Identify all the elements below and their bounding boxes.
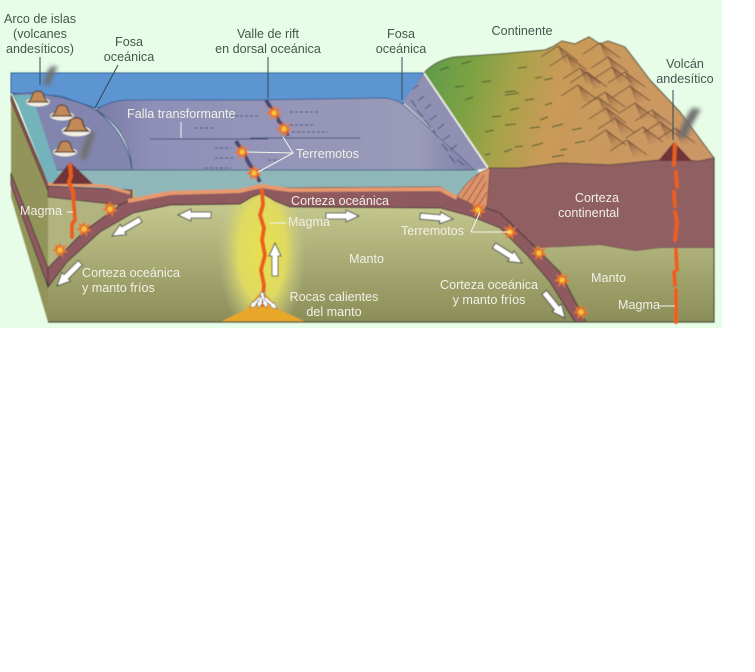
volcanic islands <box>26 91 91 156</box>
island arc sea floor <box>13 93 132 170</box>
label: rift valley: Valle de rift <box>237 27 299 41</box>
label: island arc: andesíticos) <box>6 42 74 56</box>
continent vegetation marks <box>440 61 585 157</box>
label: island arc: (volcanes <box>13 27 67 41</box>
labels <box>4 12 714 319</box>
label: cold crust left: Corteza oceánica <box>82 266 180 280</box>
label: trench right: Fosa <box>387 27 415 41</box>
label: cold crust right: Corteza oceánica <box>440 278 538 292</box>
mantle plume glow <box>223 194 301 314</box>
label: cold crust right: y manto fríos <box>453 293 525 307</box>
front frame <box>48 158 714 322</box>
label: island arc: Arco de islas <box>4 12 76 26</box>
hot rocks base <box>220 290 306 322</box>
accretionary wedge <box>457 168 490 210</box>
submerged teal band <box>48 168 480 204</box>
magma conduits <box>69 145 677 322</box>
volcano left <box>52 162 93 184</box>
label: andesitic volcano: Volcán <box>666 57 704 71</box>
label: mantle right: Manto <box>591 271 626 285</box>
oceanic crust and slabs <box>48 185 586 322</box>
label: mantle centre: Manto <box>349 252 384 266</box>
trench hatch marks <box>411 85 464 165</box>
label: andesitic volcano: andesítico <box>656 72 714 86</box>
continental crust <box>480 158 714 251</box>
arrows <box>53 209 570 322</box>
ocean floor surface <box>96 98 475 170</box>
smoke plumes <box>44 66 701 160</box>
left side face <box>11 93 48 322</box>
ocean water <box>11 73 424 108</box>
label: trench left: Fosa <box>115 35 143 49</box>
label: continent: Continente <box>492 24 552 38</box>
rift and transform faults <box>150 100 360 182</box>
label: continental crust: continental <box>558 206 619 220</box>
mountains <box>541 43 695 157</box>
white coast line <box>424 73 488 168</box>
trench slope <box>403 73 488 170</box>
continent surface <box>424 37 714 168</box>
label: magma ridge: Magma <box>288 215 330 229</box>
right mantle <box>520 240 714 322</box>
upper plate crust <box>48 186 132 205</box>
label: rift valley: en dorsal oceánica <box>215 42 321 56</box>
label: trench right: oceánica <box>376 42 426 56</box>
left wedge above slab <box>48 190 135 290</box>
oceanic crust orange layer <box>128 186 457 201</box>
background panel <box>0 0 722 328</box>
label: magma left: Magma <box>20 204 62 218</box>
label: earthquakes trench: Terremotos <box>401 224 464 238</box>
leader lines <box>40 57 675 306</box>
volcano right <box>658 142 692 161</box>
label: transform fault: Falla transformante <box>127 107 236 121</box>
teal shore strip <box>14 95 62 186</box>
label: trench left: oceánica <box>104 50 154 64</box>
block diagram <box>11 37 714 342</box>
label: continental crust: Corteza <box>575 191 619 205</box>
label: hot mantle rocks: Rocas calientes <box>290 290 378 304</box>
label: magma right: Magma <box>618 298 660 312</box>
label: earthquakes ridge: Terremotos <box>296 147 359 161</box>
earthquake stars <box>52 105 589 320</box>
label: cold crust left: y manto fríos <box>82 281 155 295</box>
mantle <box>48 193 575 322</box>
label: hot mantle rocks: del manto <box>306 305 362 319</box>
label: oceanic crust: Corteza oceánica <box>291 194 389 208</box>
